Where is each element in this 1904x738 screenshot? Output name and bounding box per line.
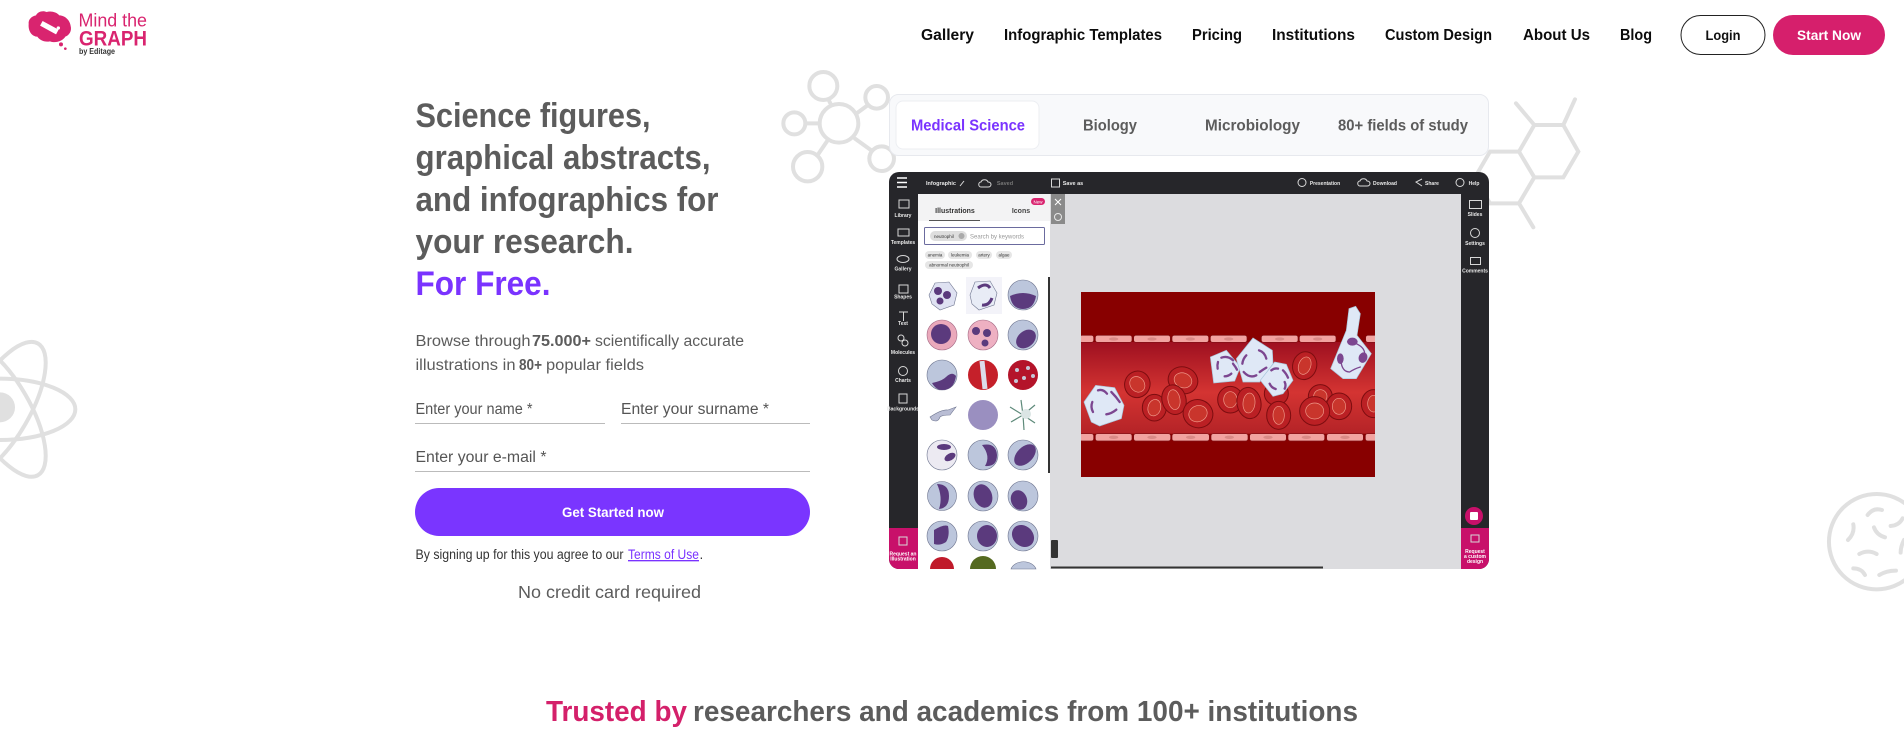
- logo wordmark: GRAPH: [79, 28, 147, 50]
- hero description: illustrations in: [416, 357, 516, 374]
- login button: [1681, 16, 1765, 54]
- logo brain icon: [29, 11, 71, 50]
- category tabs panel: Biology: [1083, 118, 1137, 134]
- panel close controls: [1051, 194, 1065, 224]
- top toolbar: Infographic: [926, 181, 956, 187]
- comments tool: Comments: [1462, 268, 1488, 274]
- canvas collapse handle: [1051, 540, 1058, 558]
- left sidebar: Templates: [891, 240, 915, 246]
- hero heading: graphical abstracts,: [416, 139, 710, 177]
- suggestion chips: abnormal neutrophil: [929, 262, 969, 268]
- chat bubble: [1465, 507, 1483, 525]
- left sidebar: Gallery: [895, 266, 912, 272]
- hero description: popular fields: [546, 357, 644, 374]
- decorative microbe icon: [1829, 494, 1904, 589]
- illustrations panel: Icons: [1012, 208, 1030, 215]
- decorative atom icon: [0, 329, 75, 490]
- decorative hexagon molecule icon: [1475, 99, 1578, 227]
- top toolbar: Download: [1373, 181, 1397, 187]
- canvas blood vessel illustration: [1081, 292, 1375, 477]
- field: name: Enter your name *: [416, 401, 532, 418]
- hero heading: your research.: [416, 223, 634, 261]
- request an illustration box: Request an: [890, 552, 916, 558]
- category tabs panel: Microbiology: [1205, 118, 1300, 134]
- logo wordmark: Mind the: [78, 10, 147, 30]
- trusted by heading: researchers and academics from 100+ institutions: [693, 696, 1358, 728]
- start now button: [1773, 15, 1885, 55]
- field: email: Enter your e-mail *: [416, 449, 546, 466]
- suggestion chips: artery: [978, 252, 990, 258]
- category tabs panel: [890, 94, 1488, 156]
- logo wordmark: [78, 10, 147, 56]
- illustrations panel: Illustrations: [935, 208, 975, 215]
- canvas area: [1050, 194, 1461, 569]
- illustration grid: [927, 277, 1040, 569]
- request a custom design box: [1461, 528, 1489, 569]
- navigation menu: [921, 27, 1652, 44]
- settings tool: Settings: [1465, 241, 1485, 247]
- hero description: Browse through: [416, 333, 530, 350]
- vessel wall cells: [1080, 335, 1379, 441]
- hero description: scientifically accurate: [595, 333, 744, 350]
- slides tool: Slides: [1468, 212, 1483, 218]
- left sidebar: Charts: [895, 378, 911, 384]
- left sidebar: Molecules: [891, 350, 915, 356]
- suggestion chips: [925, 251, 1012, 269]
- logo: Mind the Graph: [29, 10, 147, 56]
- left sidebar: Shapes: [894, 294, 912, 300]
- panel scrollbar: [1048, 277, 1050, 473]
- request a custom design box: a custom: [1464, 554, 1487, 560]
- white blood cell, crossing vessel wall: [1331, 306, 1371, 379]
- left sidebar: Backgrounds: [887, 406, 919, 412]
- active tab: medical science: [896, 101, 1039, 149]
- hero description: 75.000+: [532, 333, 591, 350]
- start now button: Start Now: [1797, 27, 1861, 43]
- search box: Search by keywords: [970, 234, 1024, 240]
- navigation menu: Infographic Templates: [1004, 27, 1162, 44]
- active tab: medical science: Medical Science: [911, 118, 1025, 134]
- white blood cell, center group: [1210, 338, 1293, 396]
- top toolbar: Share: [1425, 181, 1439, 187]
- hero description: [416, 333, 744, 374]
- navigation menu: Pricing: [1192, 27, 1242, 44]
- top toolbar: Presentation: [1310, 181, 1340, 187]
- comments tool: [1462, 258, 1488, 274]
- get started button: [415, 488, 810, 536]
- search box: [924, 228, 1044, 244]
- hero heading: Science figures,: [416, 97, 650, 135]
- navigation menu: About Us: [1523, 27, 1590, 44]
- navigation menu: Institutions: [1272, 27, 1355, 44]
- canvas bottom scrollbar: [1051, 566, 1323, 568]
- red blood cells: [1121, 349, 1386, 432]
- navigation menu: Blog: [1620, 27, 1652, 44]
- search box: neutrophil: [934, 234, 954, 239]
- signup form fields: [415, 401, 810, 472]
- navigation menu: Gallery: [921, 27, 974, 44]
- hero heading: For Free.: [416, 265, 550, 303]
- request an illustration box: Illustration: [890, 556, 916, 562]
- get started button: Get Started now: [562, 504, 664, 520]
- hero heading: and infographics for: [416, 181, 718, 219]
- left sidebar: [887, 200, 919, 412]
- no credit card note: No credit card required: [518, 582, 701, 602]
- suggestion chips: anemia: [928, 252, 943, 258]
- top toolbar: Help: [1469, 181, 1479, 187]
- left sidebar: Text: [898, 321, 908, 327]
- white blood cell, lower left: [1084, 385, 1124, 426]
- slides tool: [1468, 200, 1483, 218]
- top toolbar: [897, 178, 1479, 187]
- top toolbar: Saved: [997, 181, 1013, 187]
- new badge: New: [1033, 200, 1043, 204]
- hero heading: [416, 97, 718, 303]
- suggestion chips: leukemia: [951, 252, 969, 258]
- terms notice: Terms of Use: [628, 547, 699, 562]
- settings tool: [1465, 228, 1485, 247]
- decorative molecule icon: [783, 72, 894, 181]
- login button: Login: [1706, 27, 1740, 43]
- right sidebar: [1461, 200, 1489, 569]
- field: surname: Enter your surname *: [621, 401, 769, 418]
- request a custom design box: design: [1467, 559, 1483, 565]
- top toolbar: Save as: [1063, 181, 1083, 187]
- suggestion chips: algae: [998, 252, 1010, 258]
- new badge: [1031, 198, 1045, 205]
- illustrations panel: [918, 194, 1050, 569]
- navigation menu: Custom Design: [1385, 27, 1492, 44]
- request a custom design box: Request: [1465, 549, 1485, 555]
- request an illustration box: [889, 528, 918, 569]
- hero description: 80+: [519, 357, 542, 374]
- left sidebar: Library: [895, 213, 912, 219]
- app screenshot: [887, 172, 1489, 569]
- logo wordmark: by Editage: [79, 47, 115, 56]
- terms notice: By signing up for this you agree to our: [416, 547, 624, 562]
- trusted by heading: Trusted by: [546, 696, 687, 728]
- category tabs panel: 80+ fields of study: [1338, 118, 1468, 134]
- terms notice: .: [700, 547, 703, 562]
